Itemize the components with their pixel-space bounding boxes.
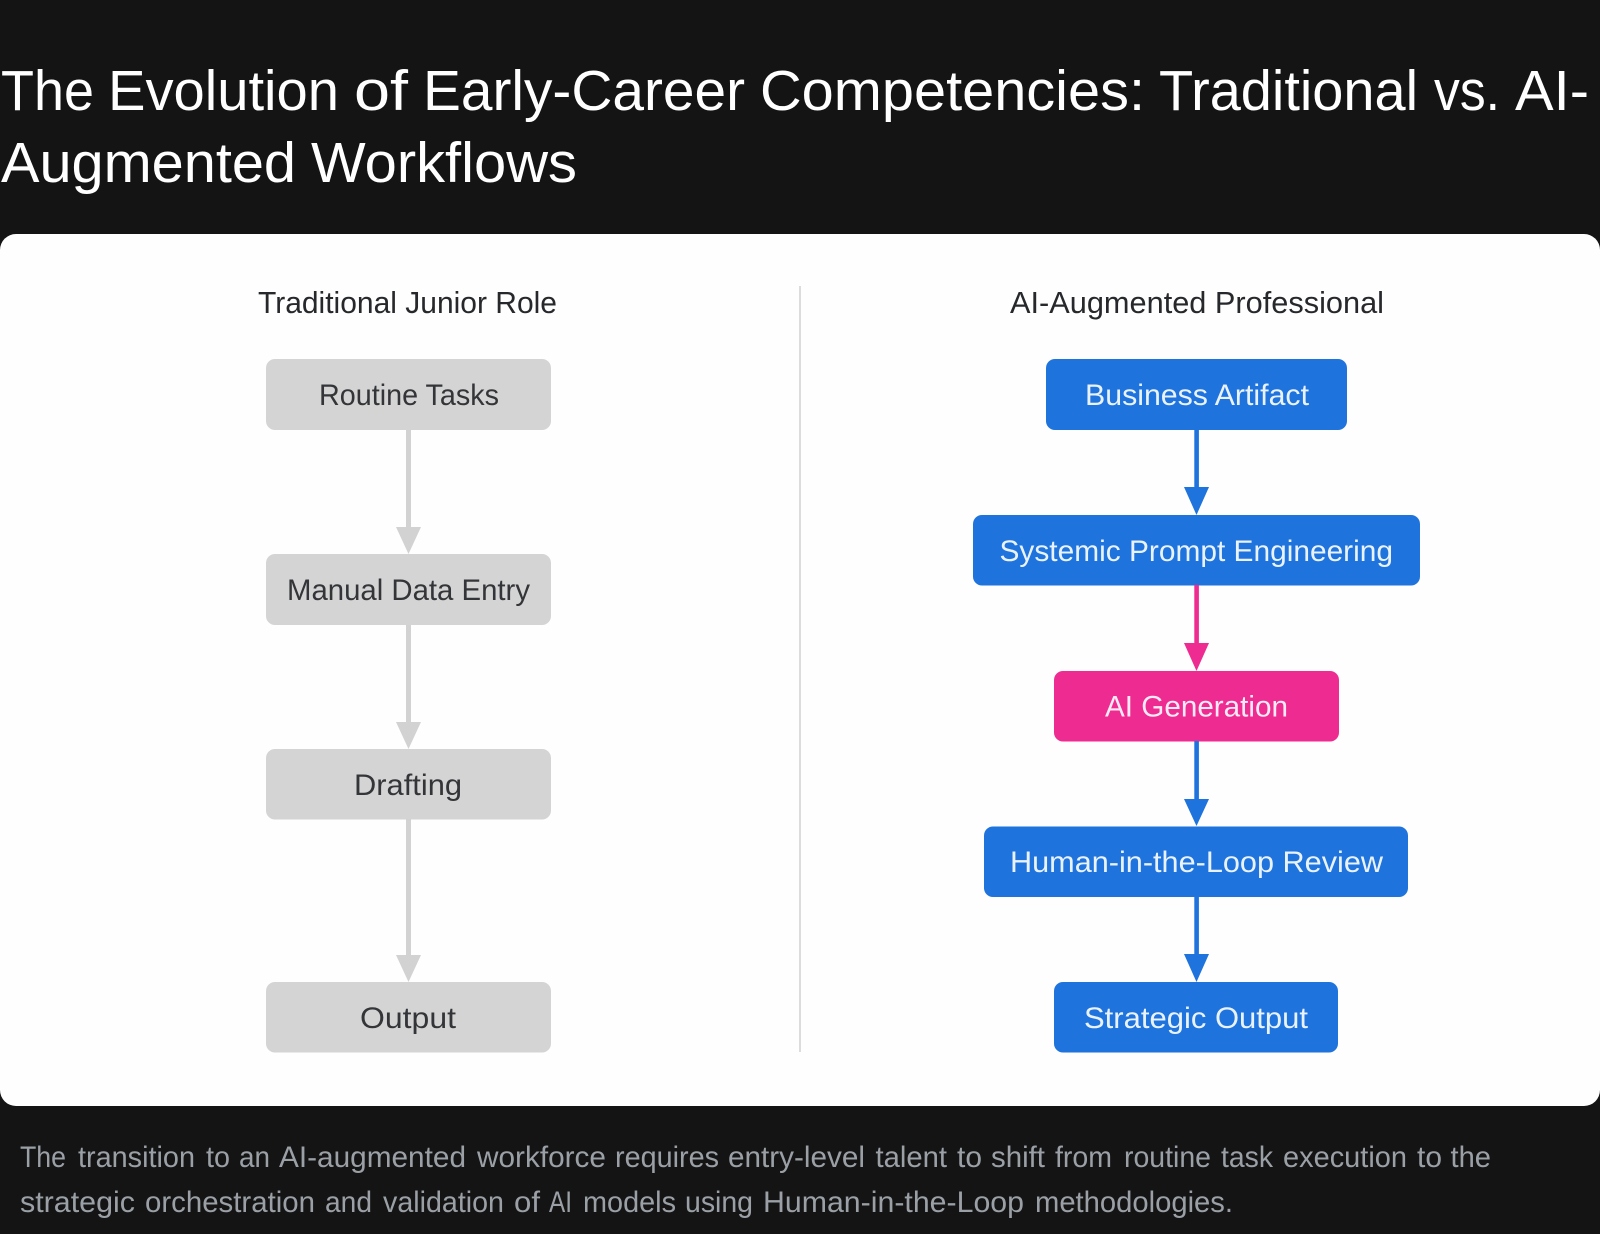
caption text: methodologies. xyxy=(1035,1186,1233,1219)
caption text: routine xyxy=(1124,1141,1211,1174)
box: strategic output xyxy=(1054,982,1338,1052)
box: strategic output: Strategic Output xyxy=(1084,1002,1308,1035)
title: AI- xyxy=(1515,59,1589,122)
box: routine tasks xyxy=(266,359,551,430)
box: output: Output xyxy=(360,1002,456,1035)
caption text: the xyxy=(1450,1141,1491,1174)
caption text: transition xyxy=(78,1141,195,1174)
arrow: business artifact to systemic prompt engineering xyxy=(1184,430,1209,515)
title: Traditional xyxy=(1159,59,1418,122)
box: manual data entry xyxy=(266,554,551,625)
caption text: workforce xyxy=(476,1141,606,1174)
arrow: ai generation to human-in-the-loop review xyxy=(1184,741,1209,826)
title: Augmented xyxy=(1,131,296,194)
caption text: requires xyxy=(615,1141,719,1174)
box: ai generation xyxy=(1054,671,1339,742)
title: Early-Career xyxy=(423,59,745,122)
caption text: task xyxy=(1221,1141,1274,1174)
arrow: human-in-the-loop review to strategic output xyxy=(1184,897,1209,982)
box: drafting xyxy=(266,749,551,820)
caption text: using xyxy=(685,1186,753,1219)
caption text: to xyxy=(206,1141,230,1174)
caption text: to xyxy=(957,1141,982,1174)
box: ai generation: AI Generation xyxy=(1105,690,1288,724)
caption text: AI xyxy=(549,1186,572,1219)
caption text: orchestration xyxy=(145,1186,315,1219)
title: of xyxy=(354,59,408,122)
title: Evolution xyxy=(108,59,339,122)
title xyxy=(1,59,1589,194)
box: systemic prompt engineering xyxy=(973,515,1420,586)
title: Competencies: xyxy=(760,59,1145,122)
caption text: models xyxy=(583,1186,676,1219)
caption text: an xyxy=(239,1141,270,1174)
arrow: routine tasks to manual data entry xyxy=(396,430,421,554)
box: human-in-the-loop review: Human-in-the-Loop Review xyxy=(1010,846,1384,879)
box: systemic prompt engineering: Systemic Prompt Engineering xyxy=(1000,535,1393,568)
arrow: drafting to output xyxy=(396,819,421,982)
title: vs. xyxy=(1434,59,1500,122)
caption text: execution xyxy=(1283,1141,1407,1174)
heading: ai-augmented professional: AI-Augmented Professional xyxy=(1010,285,1384,320)
box: drafting: Drafting xyxy=(354,769,462,802)
caption text: AI-augmented xyxy=(279,1141,466,1174)
box: human-in-the-loop review xyxy=(984,826,1408,897)
title: The xyxy=(1,59,94,122)
box: output xyxy=(266,982,551,1052)
caption text: strategic xyxy=(20,1186,135,1219)
title: Workflows xyxy=(311,131,577,194)
caption text: Human-in-the-Loop xyxy=(763,1186,1024,1219)
arrow: manual data entry to drafting xyxy=(396,625,421,749)
caption text: talent xyxy=(876,1141,948,1174)
caption text: from xyxy=(1055,1141,1112,1174)
caption text: entry-level xyxy=(728,1141,865,1174)
caption text: validation xyxy=(383,1186,504,1219)
caption text: of xyxy=(514,1186,541,1219)
caption text: The xyxy=(20,1141,66,1174)
caption text: to xyxy=(1417,1141,1442,1174)
heading: traditional junior role: Traditional Junior Role xyxy=(258,285,557,320)
box: manual data entry: Manual Data Entry xyxy=(287,574,530,607)
box: routine tasks: Routine Tasks xyxy=(319,379,499,412)
caption text xyxy=(20,1141,1491,1219)
panel: comparison diagram xyxy=(0,234,1600,1106)
box: business artifact: Business Artifact xyxy=(1085,379,1309,412)
caption text: and xyxy=(325,1186,372,1219)
box: business artifact xyxy=(1046,359,1347,430)
arrow: systemic prompt engineering to ai generation xyxy=(1184,585,1209,671)
caption text: shift xyxy=(991,1141,1046,1174)
